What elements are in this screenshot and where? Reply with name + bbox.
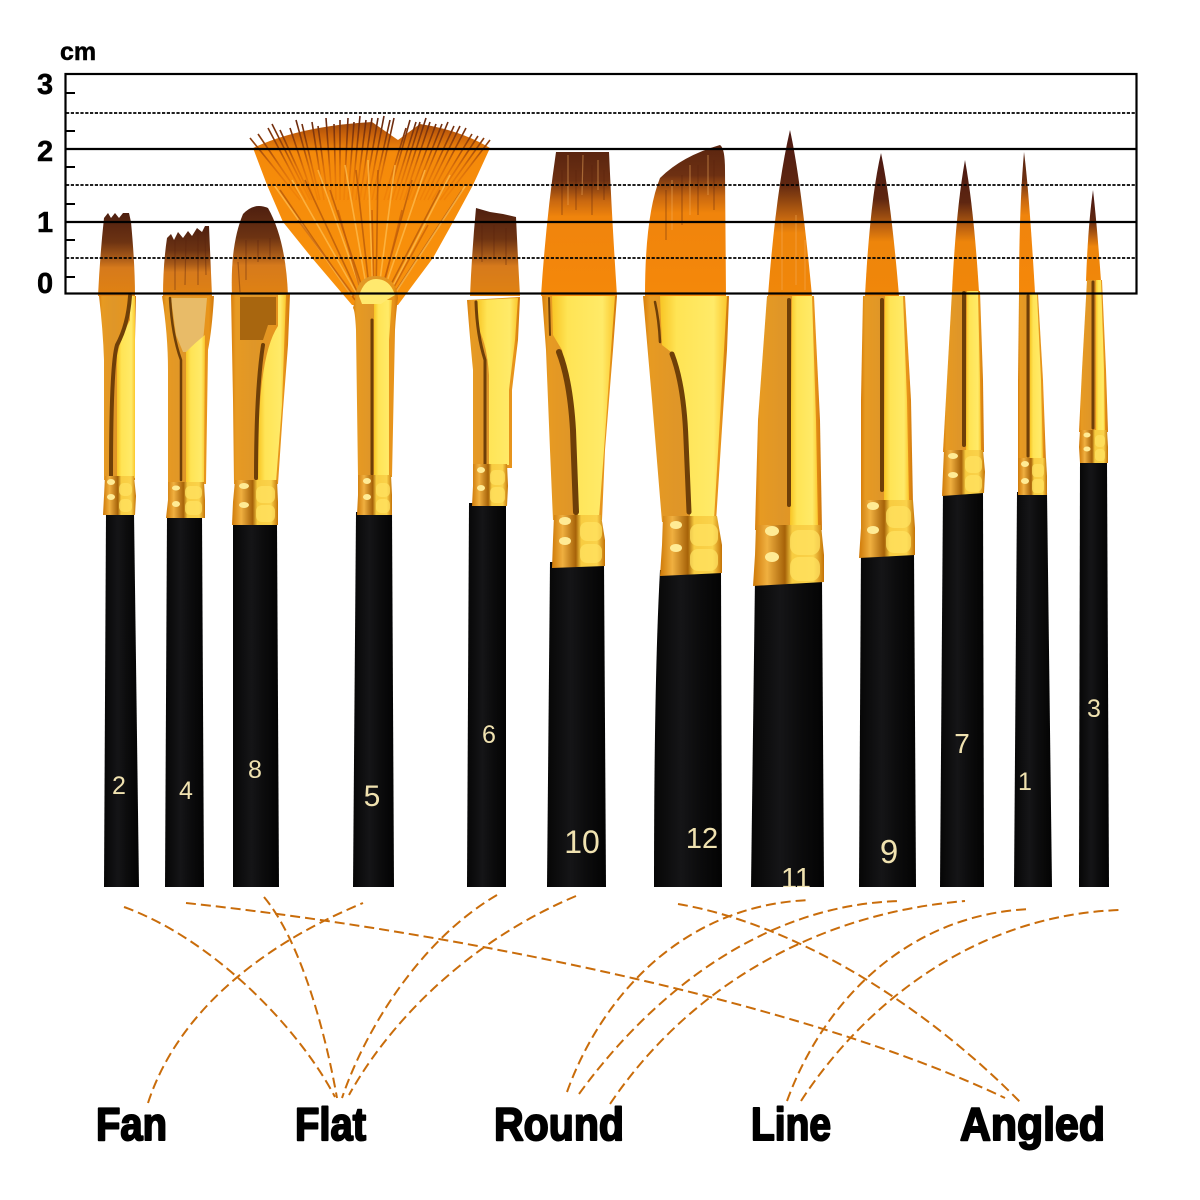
- size number: 3: [1087, 695, 1101, 723]
- ferrule shadow: [111, 296, 130, 476]
- size number: 4: [179, 777, 193, 805]
- size number: 6: [482, 721, 496, 749]
- size number: 12: [686, 823, 718, 855]
- ferrule highlight: [117, 296, 135, 478]
- ferrule shadow: [170, 298, 181, 480]
- axis 2: 2: [37, 136, 53, 168]
- brush 8: [231, 206, 290, 887]
- bristles: [98, 213, 135, 296]
- ferrule shadow: [1026, 296, 1030, 456]
- solid gridlines: [66, 149, 1137, 222]
- ferrule highlight: [1030, 294, 1043, 460]
- handle: [751, 578, 824, 887]
- bristles: [232, 206, 288, 296]
- label: line: Line: [751, 1098, 831, 1150]
- ferrule: [353, 276, 398, 477]
- label: fan: Fan: [96, 1098, 167, 1150]
- ferrule highlight: [1096, 280, 1105, 430]
- crimp: [166, 482, 205, 518]
- crimp: [660, 516, 722, 576]
- ferrule: [99, 296, 136, 480]
- axis 1: 1: [37, 207, 53, 239]
- dashed gridlines: [66, 113, 1135, 258]
- ferrule pale top: [171, 298, 207, 352]
- label: round: Round: [494, 1098, 624, 1150]
- brush 1: [1014, 152, 1052, 887]
- brush 9: [859, 153, 916, 887]
- connector curves: [124, 895, 1120, 1104]
- axis 3: 3: [37, 69, 53, 101]
- tick marks: [66, 93, 75, 277]
- ferrule: [467, 297, 520, 468]
- ferrule shadow: [787, 300, 791, 505]
- bristles: [1019, 152, 1035, 293]
- ferrule: [643, 296, 729, 522]
- ferrule shadow: [1092, 282, 1094, 428]
- handle: [165, 515, 204, 887]
- brush 10: [541, 152, 617, 887]
- brush 6: [467, 208, 520, 887]
- axis 0: 0: [37, 268, 53, 300]
- line connectors: [787, 909, 1030, 1101]
- unit label: cm: [60, 38, 96, 66]
- bristle streaks: [568, 155, 598, 205]
- bristles: [952, 160, 979, 292]
- handle: [233, 522, 279, 887]
- label: angled: Angled: [960, 1098, 1105, 1150]
- crimp: [753, 525, 824, 586]
- ferrule: [1018, 294, 1046, 462]
- ferrule highlight: [660, 296, 727, 520]
- size number: 8: [248, 756, 262, 784]
- handle: [1079, 460, 1109, 887]
- handle: [654, 570, 722, 887]
- ferrule highlight: [884, 296, 909, 503]
- ferrule highlight: [186, 335, 205, 482]
- ferrule: [1079, 280, 1108, 432]
- size number: 9: [880, 833, 898, 870]
- ferrule shadow: [256, 345, 263, 478]
- bristles: [865, 153, 899, 296]
- fan connector: [148, 903, 363, 1103]
- bristles: [470, 208, 520, 296]
- bristle streaks: [482, 225, 506, 265]
- label: flat: Flat: [295, 1098, 366, 1150]
- crimp: [942, 450, 985, 496]
- bristles: [645, 145, 726, 296]
- size number: 5: [364, 780, 380, 813]
- ferrule shadow: [370, 320, 374, 474]
- ferrule highlight: [552, 296, 615, 518]
- ferrule shadow: [476, 302, 485, 464]
- bristles: [768, 130, 812, 296]
- handle: [353, 512, 394, 887]
- ferrule: [542, 296, 617, 520]
- bristle streaks: [174, 251, 207, 290]
- bristle streaks: [238, 238, 270, 292]
- handle: [467, 503, 506, 887]
- handle: [104, 512, 139, 887]
- ferrule highlight: [477, 298, 518, 465]
- crimp: [1018, 458, 1047, 495]
- size number: 7: [954, 728, 970, 759]
- ferrule oval: [359, 279, 395, 304]
- ferrule: [231, 294, 290, 484]
- ruler frame: [66, 74, 1136, 294]
- round connectors: [567, 900, 810, 1092]
- size number: 10: [564, 824, 600, 860]
- ferrule shadow: [962, 293, 966, 445]
- fan streaks: [274, 160, 466, 300]
- ferrule: [162, 296, 214, 484]
- handle: [1014, 492, 1052, 887]
- ferrule: [943, 291, 984, 452]
- crimp: [552, 515, 605, 568]
- handle: [859, 550, 916, 887]
- brush 2: [98, 213, 139, 887]
- brush 5 fan: [250, 116, 490, 887]
- angled connectors: [186, 903, 1005, 1098]
- bristles: [1086, 190, 1101, 281]
- ferrule: [861, 296, 913, 505]
- ferrule: [755, 296, 822, 530]
- size number: 11: [781, 863, 811, 895]
- ferrule highlight: [790, 296, 818, 528]
- size number: 2: [112, 772, 126, 800]
- ferrule highlight: [258, 295, 286, 482]
- crimp: [232, 480, 278, 525]
- fan bristle tips: [250, 116, 490, 200]
- crimp: [357, 475, 392, 515]
- type labels: [96, 1098, 1105, 1150]
- bristle streaks: [782, 215, 805, 290]
- handle: [940, 490, 984, 887]
- centimetre ruler: [37, 38, 1137, 300]
- brush 7: [940, 160, 985, 887]
- ferrule highlight: [966, 291, 981, 450]
- crimp: [103, 476, 136, 515]
- bristle streaks: [672, 155, 708, 230]
- ferrule label patch: [240, 297, 276, 340]
- bristles: [163, 226, 212, 296]
- handle: [547, 562, 606, 887]
- flat connectors: [124, 907, 335, 1097]
- crimp: [859, 500, 915, 558]
- ferrule shadow: [549, 298, 550, 335]
- ferrule shadow: [880, 300, 884, 490]
- ferrule shadow: [655, 302, 660, 342]
- brush 4: [162, 226, 214, 887]
- crimp: [472, 464, 508, 506]
- brush 11: [751, 130, 824, 895]
- fan body: [253, 122, 490, 305]
- brush 3: [1079, 190, 1109, 887]
- size number: 1: [1018, 768, 1032, 796]
- brush 12: [643, 145, 729, 887]
- crimp: [1079, 430, 1108, 463]
- bristles: [541, 152, 617, 296]
- ferrule highlight: [374, 300, 392, 475]
